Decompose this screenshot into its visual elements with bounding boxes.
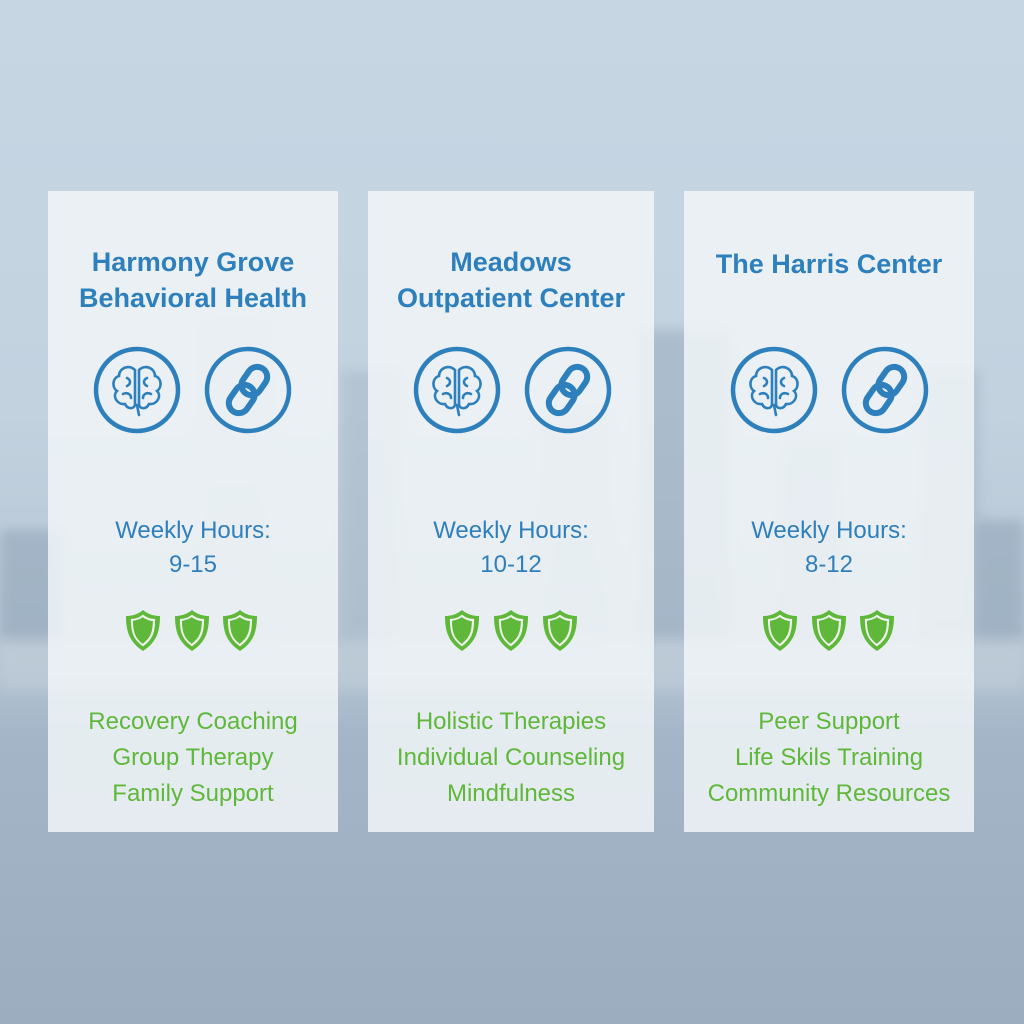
services 3: Peer Support bbox=[758, 708, 900, 735]
services 2: Individual Counseling bbox=[397, 744, 625, 771]
shields 3 bbox=[763, 610, 894, 651]
services 2: Holistic Therapies bbox=[416, 708, 606, 735]
title 1: Harmony Grove bbox=[92, 247, 294, 277]
icon: chain 2 bbox=[527, 349, 609, 431]
hours 1 bbox=[115, 517, 271, 578]
title 1 bbox=[79, 247, 307, 313]
panel: Meadows bbox=[368, 191, 654, 832]
hours 2: Weekly Hours: bbox=[433, 517, 589, 544]
services 1: Recovery Coaching bbox=[88, 708, 298, 735]
services 3: Community Resources bbox=[708, 780, 950, 807]
shields 1 bbox=[126, 610, 257, 651]
hours 3 bbox=[751, 517, 907, 578]
panel: Harmony Grove bbox=[48, 191, 338, 832]
icon: chain 3 bbox=[844, 349, 926, 431]
hours 3: 8-12 bbox=[805, 551, 853, 578]
title 2: Meadows bbox=[450, 247, 572, 277]
shields 2 bbox=[445, 610, 577, 651]
hours 2: 10-12 bbox=[480, 551, 542, 578]
services 1 bbox=[88, 708, 298, 807]
services 3 bbox=[708, 708, 950, 807]
services 2 bbox=[397, 708, 625, 807]
title 2 bbox=[397, 247, 625, 313]
services 3: Life Skils Training bbox=[735, 744, 923, 771]
panel: Harris bbox=[684, 191, 974, 832]
icon: chain 1 bbox=[207, 349, 289, 431]
services 1: Group Therapy bbox=[112, 744, 273, 771]
title 3: The Harris Center bbox=[716, 249, 942, 279]
icon: brain 1 bbox=[96, 349, 178, 431]
icon: brain 2 bbox=[416, 349, 498, 431]
hours 1: 9-15 bbox=[169, 551, 217, 578]
title 1: Behavioral Health bbox=[79, 283, 307, 313]
title 2: Outpatient Center bbox=[397, 283, 625, 313]
services 2: Mindfulness bbox=[447, 780, 575, 807]
hours 1: Weekly Hours: bbox=[115, 517, 271, 544]
hours 3: Weekly Hours: bbox=[751, 517, 907, 544]
icon: brain 3 bbox=[733, 349, 815, 431]
services 1: Family Support bbox=[112, 780, 274, 807]
hours 2 bbox=[433, 517, 589, 578]
